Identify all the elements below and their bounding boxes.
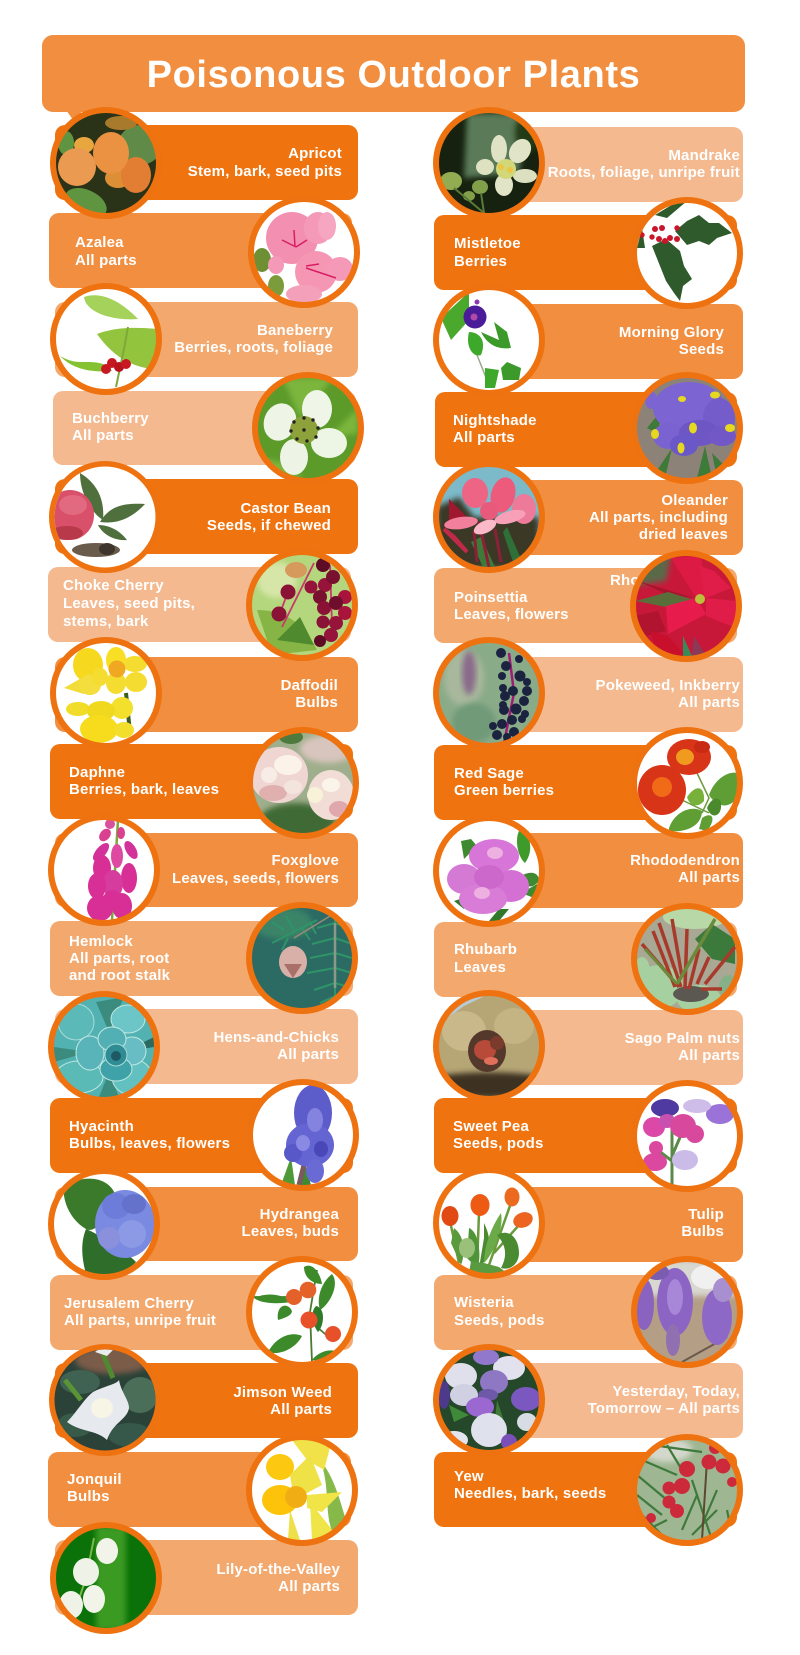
icon: lily-of-the-valley photo xyxy=(53,1525,159,1631)
label bar: Jonquil: Bulbs xyxy=(67,1488,110,1505)
label bar: Oleander: All parts, including xyxy=(589,509,728,526)
label bar: Red Sage: Green berries xyxy=(454,782,554,799)
icon: mistletoe photo xyxy=(634,200,740,306)
label bar: Nightshade xyxy=(435,392,737,467)
label bar: Morning Glory xyxy=(445,304,743,379)
icon: mandrake photo xyxy=(436,110,542,216)
icon: tulip photo xyxy=(436,1170,542,1276)
label bar: Hyacinth: Bulbs, leaves, flowers xyxy=(69,1135,230,1152)
label bar: Wisteria xyxy=(434,1275,737,1350)
label bar: Lily-of-the-Valley: Lily-of-the-Valley xyxy=(216,1561,340,1578)
label bar: Mistletoe xyxy=(434,215,737,290)
label bar: Poinsettia: Poinsettia xyxy=(454,589,528,606)
label bar: Choke Cherry: Choke Cherry xyxy=(63,577,164,594)
label bar: Wisteria: Wisteria xyxy=(454,1294,514,1311)
label bar: Hydrangea: Leaves, buds xyxy=(242,1223,339,1240)
label bar: Hemlock: and root stalk xyxy=(69,967,171,984)
icon: nightshade photo xyxy=(634,375,740,481)
label bar: Pokeweed, Inkberry xyxy=(445,657,743,732)
label bar: Lily-of-the-Valley xyxy=(55,1540,358,1615)
label bar: Baneberry: Berries, roots, foliage xyxy=(174,339,333,356)
label bar: Baneberry xyxy=(55,302,358,377)
icon: poinsettia photo xyxy=(633,553,739,659)
label bar: Yesterday, Today, Tomorrow: Tomorrow – All parts xyxy=(588,1400,740,1417)
label bar: Daphne: Daphne xyxy=(69,764,125,781)
label bar: Daphne: Berries, bark, leaves xyxy=(69,781,219,798)
label bar: Red Sage xyxy=(434,745,737,820)
label bar: Tulip xyxy=(445,1187,743,1262)
label bar: Mandrake: Roots, foliage, unripe fruit xyxy=(548,164,740,181)
label bar: Hyacinth xyxy=(50,1098,353,1173)
icon: hens-and-chicks photo xyxy=(51,994,157,1100)
icon: jonquil photo xyxy=(249,1437,355,1543)
label bar: Jerusalem Cherry xyxy=(50,1275,353,1350)
label bar: Buchberry: All parts xyxy=(72,427,134,444)
label bar: Poinsettia: Leaves, flowers xyxy=(454,606,569,623)
label bar: Wisteria: Seeds, pods xyxy=(454,1312,545,1329)
label bar: Rhubarb: Leaves xyxy=(454,959,506,976)
label bar: Jonquil xyxy=(48,1452,351,1527)
label bar: Hydrangea: Hydrangea xyxy=(260,1206,339,1223)
label bar: Poinsettia xyxy=(434,568,737,643)
label bar: Rhubarb xyxy=(434,922,737,997)
icon: baneberry photo xyxy=(53,286,159,392)
label bar: Jerusalem Cherry: Jerusalem Cherry xyxy=(64,1295,194,1312)
label bar: Azalea xyxy=(49,213,352,288)
label bar: Hens-and-Chicks: All parts xyxy=(277,1046,339,1063)
icon: azalea photo xyxy=(251,199,357,305)
icon: hemlock photo xyxy=(249,905,355,1011)
label bar: Rhododendron: All parts xyxy=(678,869,740,886)
label bar: Rhubarb: Rhubarb xyxy=(454,941,517,958)
label bar: Tulip: Tulip xyxy=(688,1206,724,1223)
label bar: Hemlock: Hemlock xyxy=(69,933,133,950)
label bar: Pokeweed, Inkberry: Pokeweed, Inkberry xyxy=(596,677,740,694)
label bar: Jimson Weed: Jimson Weed xyxy=(233,1384,332,1401)
label bar: Morning Glory: Morning Glory xyxy=(619,324,724,341)
icon: sweet pea photo xyxy=(634,1083,740,1189)
label bar: Mistletoe: Berries xyxy=(454,253,507,270)
icon: rhododendron photo xyxy=(436,818,542,924)
label bar: Daphne xyxy=(50,744,353,819)
label bar: Hydrangea xyxy=(55,1187,358,1261)
label bar: Rhododendron: Rhododendron xyxy=(630,852,740,869)
label bar: Hemlock xyxy=(50,921,353,996)
icon: pokeweed photo xyxy=(436,640,542,746)
icon: choke cherry photo xyxy=(249,552,355,658)
icon: daffodil photo xyxy=(53,640,159,746)
label bar: Foxglove: Leaves, seeds, flowers xyxy=(172,870,339,887)
label bar: Apricot: Apricot xyxy=(288,145,342,162)
label bar: Buchberry xyxy=(53,391,356,465)
label bar: Mandrake: Mandrake xyxy=(668,147,740,164)
label bar: Morning Glory: Seeds xyxy=(679,341,724,358)
label bar: Sago Palm nuts xyxy=(445,1010,743,1085)
label bar: Daffodil: Bulbs xyxy=(295,694,338,711)
icon: hydrangea photo xyxy=(51,1171,157,1277)
label bar: Jerusalem Cherry: All parts, unripe fruit xyxy=(64,1312,216,1329)
icon: yesterday today tomorrow photo xyxy=(436,1347,542,1453)
label bar: Mistletoe: Mistletoe xyxy=(454,235,521,252)
label bar: Oleander: dried leaves xyxy=(639,526,728,543)
label bar: Nightshade: All parts xyxy=(453,429,515,446)
label bar: Sweet Pea: Seeds, pods xyxy=(453,1135,544,1152)
icon: apricot photo xyxy=(53,110,162,224)
label bar: Tulip: Bulbs xyxy=(681,1223,724,1240)
label bar: Azalea: All parts xyxy=(75,252,137,269)
icon: daphne photo xyxy=(250,730,356,839)
icon: yew photo xyxy=(634,1437,740,1543)
label bar: Oleander xyxy=(445,480,743,555)
label bar: Azalea: Azalea xyxy=(75,234,124,251)
label bar: Lily-of-the-Valley: All parts xyxy=(278,1578,340,1595)
label bar: Hyacinth: Hyacinth xyxy=(69,1118,134,1135)
icon: wisteria photo xyxy=(634,1259,740,1365)
label bar: Pokeweed, Inkberry: All parts xyxy=(678,694,740,711)
icon: jerusalem cherry photo xyxy=(249,1259,355,1365)
label bar: Baneberry: Baneberry xyxy=(257,322,333,339)
label bar: Red Sage: Red Sage xyxy=(454,765,524,782)
icon: red sage photo xyxy=(634,730,740,836)
label bar: Rhododendron xyxy=(445,833,743,908)
label bar: Hemlock: All parts, root xyxy=(69,950,170,967)
label bar: Sweet Pea xyxy=(434,1098,737,1173)
label bar: Poinsettia: Rho xyxy=(610,572,640,589)
label bar: Sago Palm nuts: Sago Palm nuts xyxy=(625,1030,740,1047)
label bar: Sago Palm nuts: All parts xyxy=(678,1047,740,1064)
icon: buchberry photo xyxy=(255,375,361,481)
icon: hyacinth photo xyxy=(250,1082,356,1188)
label bar: Yew: Yew xyxy=(454,1468,484,1485)
label bar: Castor Bean: Seeds, if chewed xyxy=(207,517,331,534)
icon: rhubarb photo xyxy=(634,905,740,1013)
label bar: Foxglove xyxy=(55,833,358,907)
label bar: Castor Bean: Castor Bean xyxy=(240,500,331,517)
label bar: Daffodil xyxy=(55,657,358,732)
label bar: Castor Bean xyxy=(55,479,358,554)
label bar: Oleander: Oleander xyxy=(661,492,728,509)
label bar: Foxglove: Foxglove xyxy=(272,852,339,869)
icon: sago palm photo xyxy=(436,993,542,1099)
label bar: Yesterday, Today, Tomorrow xyxy=(445,1363,743,1438)
label bar: Buchberry: Buchberry xyxy=(72,410,149,427)
title banner xyxy=(42,35,745,124)
label bar: Nightshade: Nightshade xyxy=(453,412,537,429)
label bar: Yesterday, Today, Tomorrow: Yesterday, Today, xyxy=(612,1383,740,1400)
icon: jimson weed photo xyxy=(52,1346,158,1453)
label bar: Yew: Needles, bark, seeds xyxy=(454,1485,606,1502)
label bar: Jimson Weed: All parts xyxy=(270,1401,332,1418)
label bar: Apricot: Stem, bark, seed pits xyxy=(188,163,342,180)
label bar: Jonquil: Jonquil xyxy=(67,1471,122,1488)
icon: morning glory photo xyxy=(436,287,542,393)
label bar: Jimson Weed xyxy=(55,1363,358,1438)
label bar: Yew xyxy=(434,1452,737,1527)
label bar: Choke Cherry: stems, bark xyxy=(63,613,149,630)
label bar: Choke Cherry xyxy=(48,567,351,642)
label bar: Daffodil: Daffodil xyxy=(281,677,338,694)
icon: foxglove photo xyxy=(51,817,157,923)
label bar: Choke Cherry: Leaves, seed pits, xyxy=(63,595,195,612)
label bar: Mandrake xyxy=(445,127,743,202)
title banner: Poisonous Outdoor Plants xyxy=(147,54,640,96)
label bar: Apricot xyxy=(55,125,358,200)
label bar: Sweet Pea: Sweet Pea xyxy=(453,1118,529,1135)
icon: oleander photo xyxy=(436,464,542,570)
label bar: Hens-and-Chicks: Hens-and-Chicks xyxy=(213,1029,339,1046)
label bar: Hens-and-Chicks xyxy=(55,1009,358,1084)
icon: castor bean photo xyxy=(46,464,158,570)
